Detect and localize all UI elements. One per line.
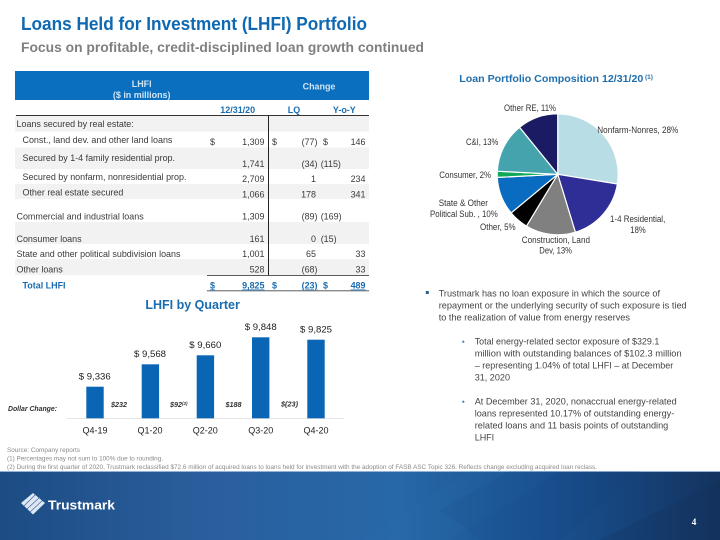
row: construction: 1,309 <box>242 137 265 147</box>
dollar change row <box>8 400 299 413</box>
bar: Q2-20: Q2-20 <box>193 425 218 435</box>
logo: Trustmark <box>21 493 116 514</box>
row: construction <box>22 135 366 147</box>
pie labels: C&I, 13% <box>466 137 498 147</box>
row: construction: Const., land dev. and other land loans <box>22 135 173 145</box>
row: nonfarm: Secured by nonfarm, nonresidential prop. <box>22 172 186 182</box>
pie labels: State & Other <box>439 198 488 208</box>
sub-bullet: nonaccrual loans <box>462 396 677 442</box>
bar: Q2-20: $ 9,660 <box>189 340 221 351</box>
table header band: LHFI <box>132 79 152 89</box>
row: construction: $ <box>210 137 215 147</box>
dollar change row: $92 <box>169 400 183 409</box>
dollar change row: $(23) <box>280 400 299 408</box>
pie labels: Political Sub. , 10% <box>430 209 498 219</box>
bar: Q4-20: Q4-20 <box>303 425 329 435</box>
pie labels: Other RE, 11% <box>504 103 556 113</box>
table header band <box>15 71 369 100</box>
row: construction: 146 <box>351 137 366 147</box>
row: 1-4 family <box>22 153 341 169</box>
dollar change row: Dollar Change: <box>8 404 58 413</box>
bar: Q4-20 <box>300 324 332 435</box>
sub-bullet: total energy exposure <box>462 336 682 382</box>
row: nonfarm: 234 <box>351 174 366 184</box>
slice: C&I <box>497 127 558 174</box>
row: other loans <box>16 264 366 274</box>
sub-bullet: nonaccrual loans: At December 31, 2020, nonaccrual energy-related <box>475 396 677 406</box>
bar: Q2-20 <box>189 340 221 435</box>
sub-bullet: nonaccrual loans: LHFI <box>475 432 494 442</box>
row: construction: $ <box>272 137 277 147</box>
row: nonfarm: 2,709 <box>242 174 265 184</box>
row: 1-4 family: (34) <box>302 159 318 169</box>
row: total: $ <box>323 280 328 290</box>
row: commercial and industrial: (169) <box>321 212 342 222</box>
bar: Q4-19 <box>79 372 111 435</box>
row: commercial and industrial: (89) <box>302 212 318 222</box>
bullet 1: to the realization of value from energy reserves <box>439 312 630 322</box>
row: consumer: 0 <box>311 234 316 244</box>
pie labels: 1-4 Residential, <box>610 214 665 224</box>
row: other real estate: 178 <box>301 190 316 200</box>
logo: Trustmark: Trustmark <box>48 498 116 512</box>
pie labels: Dev, 13% <box>539 246 572 256</box>
slice: State and Other Political Sub. <box>497 174 558 213</box>
row: commercial and industrial: 1,309 <box>242 212 265 222</box>
row: consumer <box>16 234 337 244</box>
footnotes: (1) Percentages may not sum to 100% due to rounding. <box>7 456 163 462</box>
bar: Q1-20: $ 9,568 <box>134 349 166 360</box>
slice: 1-4 Residential <box>558 174 617 232</box>
sub-bullet: nonaccrual loans: related loans and 11 basis points of outstanding <box>475 420 668 430</box>
footnotes: Source: Company reports <box>7 447 80 454</box>
chart heading: Loan Portfolio Composition: Loan Portfolio Composition 12/31/20 <box>459 74 644 85</box>
table column headings <box>220 105 356 115</box>
row: nonfarm <box>22 172 366 184</box>
footnotes: (2) During the first quarter of 2020, Trustmark reclassified $72.6 million of acquired loans to loans held for investment with the adoption of FASB ASC Topic 326. Reflects change excluding acquired loan reclass. <box>7 464 597 471</box>
bar: Q3-20 <box>245 322 277 435</box>
row: other real estate: Other real estate secured <box>22 188 123 198</box>
row: construction: $ <box>323 137 328 147</box>
table header band: Change <box>303 82 335 92</box>
bar: Q4-20: $ 9,825 <box>300 324 332 336</box>
bar: Q3-20: Q3-20 <box>248 425 273 435</box>
row: total: 9,825 <box>242 280 265 290</box>
row: state and political: 1,001 <box>242 249 265 259</box>
row: other loans: Other loans <box>16 264 63 274</box>
sub-bullet: total energy exposure: million with outstanding balances of $102.3 million <box>475 348 682 358</box>
row: state and political: State and other political subdivision loans <box>16 249 181 259</box>
slice: Consumer <box>497 171 558 177</box>
row: other loans: (68) <box>302 264 318 274</box>
dollar change row: $188 <box>225 400 242 409</box>
row: consumer: Consumer loans <box>16 234 82 244</box>
pie labels: Other, 5% <box>480 222 516 232</box>
row: state and political: 65 <box>306 249 316 259</box>
row: loans secured by real estate: Loans secured by real estate: <box>16 119 134 129</box>
sub-bullet: total energy exposure: 31, 2020 <box>475 372 510 382</box>
bar: Q4-19: Q4-19 <box>82 425 108 435</box>
bullet 1: repayment or the underlying security of such exposure is tied <box>439 300 687 310</box>
row: consumer: 161 <box>250 234 265 244</box>
bar: Q3-20: $ 9,848 <box>245 322 277 333</box>
row: 1-4 family: Secured by 1-4 family residential prop. <box>22 153 175 163</box>
chart heading: LHFI by Quarter: LHFI by Quarter <box>145 298 240 312</box>
sub-bullet: total energy exposure: – representing 1.04% of total LHFI – at December <box>475 360 673 370</box>
row: other real estate: 341 <box>351 190 366 200</box>
slice: Other RE <box>520 114 558 174</box>
table column headings: LQ <box>288 105 300 115</box>
slice: Construction, Land Dev <box>526 174 575 235</box>
bar chart: LHFI by quarter <box>8 322 344 435</box>
row: other loans: 33 <box>356 264 366 274</box>
row: total: (23) <box>302 280 318 290</box>
bar: Q4-19: $ 9,336 <box>79 372 111 382</box>
row: other real estate <box>22 188 366 200</box>
pie labels: Consumer, 2% <box>439 170 491 180</box>
bar: Q1-20 <box>134 349 166 435</box>
row: state and political: 33 <box>356 249 366 259</box>
pie chart: loan portfolio composition <box>430 103 678 256</box>
row: nonfarm: 1 <box>311 174 316 184</box>
bar: Q1-20: Q1-20 <box>137 425 163 435</box>
sub-bullet: nonaccrual loans: loans represented 10.17% of outstanding energy- <box>475 408 674 418</box>
row: total <box>22 280 366 290</box>
pie labels <box>430 103 678 256</box>
table row shading <box>15 116 369 275</box>
title: Loans Held for Investment (LHFI) Portfolio <box>21 13 367 34</box>
row: total: $ <box>210 280 215 290</box>
dollar change row: (2) <box>182 401 188 406</box>
commentary: energy exposure bullets <box>426 288 687 442</box>
pie labels: Nonfarm-Nonres, 28% <box>597 125 678 135</box>
bullet 1: Trustmark has no loan exposure in which the source of <box>439 288 660 298</box>
subtitle: Focus on profitable, credit-disciplined loan growth continued <box>21 40 424 55</box>
pie labels: Construction, Land <box>522 235 590 245</box>
chart heading: Loan Portfolio Composition: (1) <box>645 74 653 81</box>
bullet 1 <box>426 288 687 322</box>
row: construction: (77) <box>302 137 318 147</box>
table column headings: Y-o-Y <box>333 105 356 115</box>
row: total: $ <box>272 280 277 290</box>
pie labels: 18% <box>630 225 646 235</box>
row: commercial and industrial <box>16 212 342 222</box>
row: total: 489 <box>351 280 366 290</box>
page number: 4 <box>692 518 697 528</box>
panel: LHFI table <box>15 71 369 291</box>
row: 1-4 family: (115) <box>321 159 341 169</box>
footnotes <box>7 447 597 471</box>
footer band <box>0 471 720 540</box>
row: commercial and industrial: Commercial and industrial loans <box>16 212 144 222</box>
row: total: Total LHFI <box>22 280 66 290</box>
row: consumer: (15) <box>321 234 337 244</box>
sub-bullet: total energy exposure: Total energy-related sector exposure of $329.1 <box>475 336 659 346</box>
row: state and political <box>16 249 366 259</box>
slice: Other <box>511 174 558 226</box>
table column headings: 12/31/20 <box>220 105 255 115</box>
table header band: ($ in millions) <box>113 90 171 100</box>
slice: Nonfarm-Nonres <box>558 114 618 184</box>
dollar change row: $232 <box>110 400 128 409</box>
row: 1-4 family: 1,741 <box>242 159 265 169</box>
row: other real estate: 1,066 <box>242 190 265 200</box>
row: other loans: 528 <box>250 264 265 274</box>
